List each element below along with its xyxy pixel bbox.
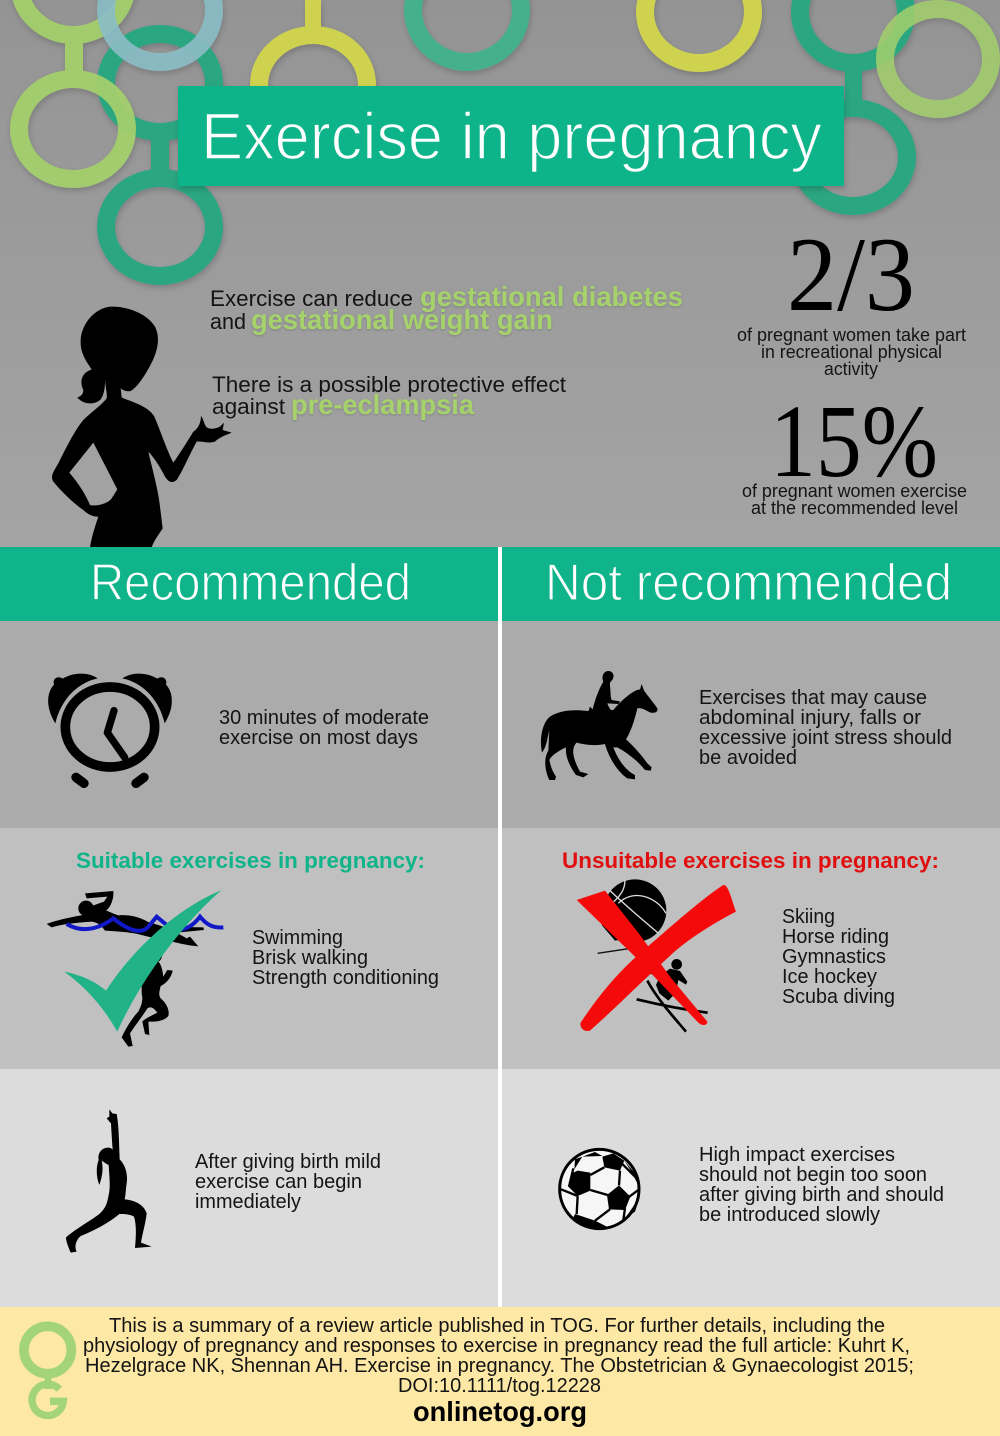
logo: OG bbox=[24, 1326, 71, 1416]
text: exercises that may cause injury: abdominal injury, falls or bbox=[699, 707, 921, 729]
ski pole bbox=[598, 948, 635, 953]
ring chain: left dark green bbox=[106, 34, 214, 276]
text: after giving birth bbox=[195, 1151, 381, 1213]
table bands bbox=[0, 621, 1000, 1307]
text block: benefits: against bbox=[212, 394, 286, 419]
text: exercises that may cause injury bbox=[699, 687, 952, 769]
list: unsuitable exercises: Skiing bbox=[782, 906, 835, 928]
text: high impact exercises: should not begin too soon bbox=[699, 1164, 927, 1186]
statistic: 15%: at the recommended level bbox=[751, 497, 958, 518]
skier bbox=[637, 959, 708, 1032]
list: suitable exercises bbox=[252, 927, 439, 989]
text block: benefits: There is a possible protective effect bbox=[212, 372, 567, 397]
header: recommended bbox=[0, 547, 498, 621]
statistic: 2/3: 2/3 bbox=[787, 216, 915, 333]
citation text: DOI:10.1111/tog.12228 bbox=[398, 1375, 601, 1397]
list: unsuitable exercises bbox=[782, 906, 895, 1008]
hero background bbox=[0, 0, 1000, 547]
decorative linked rings bbox=[19, 0, 991, 276]
citation text: This is a summary of a review article published in TOG. For further details, including the bbox=[109, 1315, 885, 1337]
text: after giving birth: exercise can begin bbox=[195, 1171, 362, 1193]
text: exercises that may cause injury: Exercises that may cause bbox=[699, 687, 927, 709]
ring chain: left light green bbox=[19, 0, 127, 179]
list: unsuitable exercises: Ice hockey bbox=[782, 966, 877, 988]
text block: benefits: and bbox=[210, 309, 246, 334]
header: not recommended: Not recommended bbox=[545, 554, 952, 612]
list: unsuitable exercises: Horse riding bbox=[782, 926, 889, 948]
text block: benefits: Exercise can reduce bbox=[210, 286, 413, 311]
ring: teal bbox=[413, 0, 521, 62]
text: 30 minutes: 30 minutes of moderate bbox=[219, 707, 429, 729]
ring: yellow left bbox=[259, 0, 367, 135]
text: exercises that may cause injury: be avoided bbox=[699, 747, 797, 769]
title: Exercise in pregnancy bbox=[201, 99, 822, 173]
list: suitable exercises: Swimming bbox=[252, 927, 343, 949]
text: exercises that may cause injury: excessive joint stress should bbox=[699, 727, 952, 749]
text: 30 minutes: exercise on most days bbox=[219, 727, 418, 749]
icon: woman silhouette bbox=[52, 307, 232, 547]
statistic: 2/3 bbox=[737, 216, 966, 379]
icon: yoga pose bbox=[66, 1109, 152, 1253]
text: after giving birth: immediately bbox=[195, 1191, 301, 1213]
citation text: Hezelgrace NK, Shennan AH. Exercise in pregnancy. The Obstetrician & Gynaecologist 2015; bbox=[85, 1355, 914, 1377]
icon: horse and rider bbox=[541, 671, 658, 780]
text: 30 minutes bbox=[219, 707, 429, 749]
red cross bbox=[577, 885, 736, 1031]
text: high impact exercises: High impact exercises bbox=[699, 1144, 895, 1166]
waves bbox=[67, 917, 223, 931]
text block: benefits: gestational diabetes bbox=[420, 281, 683, 312]
citation text: physiology of pregnancy and responses to exercise in pregnancy read the full article: Kuhrt K, bbox=[83, 1335, 910, 1357]
text: high impact exercises: after giving birth and should bbox=[699, 1184, 944, 1206]
statistic: 15%: of pregnant women exercise bbox=[742, 480, 967, 501]
icon: swimmer, runner and tick bbox=[47, 890, 223, 1047]
website: onlinetog.org bbox=[413, 1396, 587, 1427]
icon: alarm clock bbox=[48, 674, 172, 783]
list: suitable exercises: Strength conditioning bbox=[252, 967, 439, 989]
text block: benefits: gestational weight gain bbox=[251, 304, 553, 335]
header: not recommended bbox=[502, 547, 1000, 621]
text: high impact exercises bbox=[699, 1144, 944, 1226]
swimmer bbox=[47, 891, 204, 946]
text: high impact exercises: be introduced slowly bbox=[699, 1204, 880, 1226]
header: recommended: Recommended bbox=[90, 554, 411, 612]
statistic: 2/3: in recreational physical bbox=[761, 341, 942, 362]
list: unsuitable exercises: Scuba diving bbox=[782, 986, 895, 1008]
ring: yellow right bbox=[645, 0, 753, 63]
heading: unsuitable exercises: Unsuitable exercises in pregnancy: bbox=[562, 848, 939, 873]
runner bbox=[122, 950, 173, 1047]
text block: benefits: pre-eclampsia bbox=[291, 389, 475, 420]
heading: suitable exercises: Suitable exercises in pregnancy: bbox=[76, 848, 425, 873]
ring chain: right dark green bbox=[799, 0, 907, 206]
title banner bbox=[178, 86, 844, 186]
statistic: 2/3: of pregnant women take part bbox=[737, 324, 966, 345]
basketball bbox=[602, 879, 666, 942]
statistic: 2/3: activity bbox=[824, 358, 879, 379]
tick bbox=[64, 890, 222, 1032]
footer panel bbox=[0, 1307, 1000, 1436]
list: unsuitable exercises: Gymnastics bbox=[782, 946, 886, 968]
icon: basketball, skier and red cross bbox=[577, 879, 736, 1032]
citation text bbox=[83, 1315, 914, 1397]
text: after giving birth: After giving birth mild bbox=[195, 1151, 381, 1173]
ring: blue bbox=[106, 0, 214, 62]
ring: right light green bbox=[885, 9, 991, 109]
icon: soccer ball bbox=[560, 1149, 640, 1229]
list: suitable exercises: Brisk walking bbox=[252, 947, 368, 969]
rider bbox=[588, 671, 620, 712]
text block: benefits bbox=[210, 281, 683, 420]
statistic: 15%: 15% bbox=[770, 384, 938, 499]
horse bbox=[541, 684, 658, 780]
